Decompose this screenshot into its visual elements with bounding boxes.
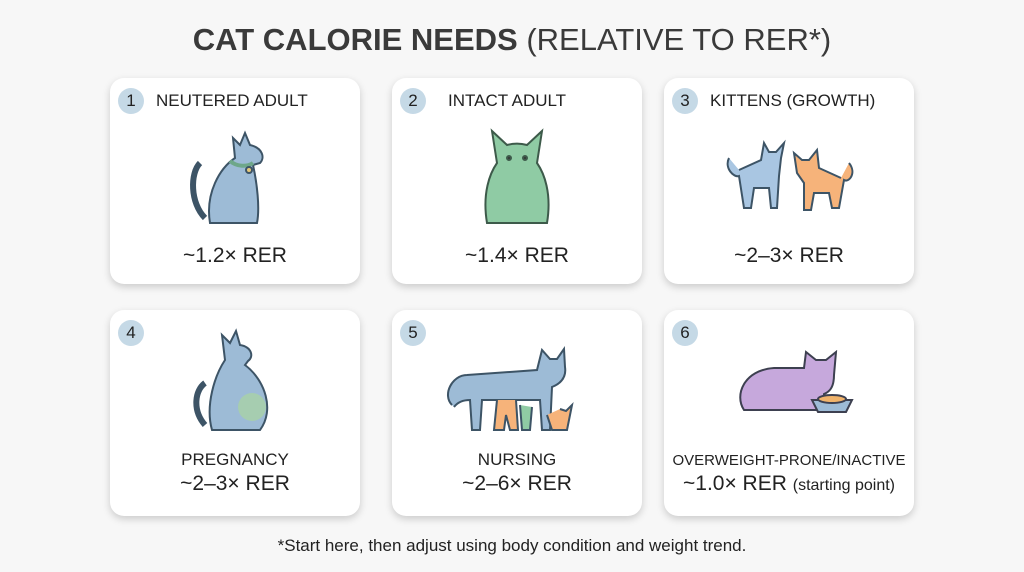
label: NEUTERED ADULT <box>156 91 308 110</box>
panel: overweight-prone <box>664 310 914 516</box>
panel: intact adult <box>392 78 642 284</box>
icon: pregnant cat <box>193 328 268 431</box>
title: CAT CALORIE NEEDS (RELATIVE TO RER*) <box>193 22 831 57</box>
panel: neutered adult <box>110 78 360 284</box>
panel: nursing: 5 <box>408 323 418 342</box>
icon: sitting cat <box>190 130 264 224</box>
value: ~2–3× RER <box>180 472 290 495</box>
panel: kittens: 3 <box>680 91 690 110</box>
value: ~1.2× RER <box>183 244 287 267</box>
badge 1 <box>118 88 144 114</box>
panel: intact adult: 2 <box>408 91 418 110</box>
icon: lying cat with bowl <box>739 350 854 413</box>
icon: two kittens <box>726 140 854 211</box>
panel: overweight-prone: ~1.0× RER (starting point) <box>683 472 895 495</box>
panel: overweight-prone: 6 <box>680 323 690 342</box>
panel: kittens: ~2–3× RER <box>734 244 844 267</box>
panel: overweight-prone: OVERWEIGHT-PRONE/INACTIVE <box>672 452 906 469</box>
panel: kittens <box>664 78 914 284</box>
panel: pregnancy <box>110 310 360 516</box>
label: PREGNANCY <box>181 450 289 469</box>
badge 1: 1 <box>126 91 136 110</box>
icon: mother cat with kittens <box>446 346 574 431</box>
footnote: *Start here, then adjust using body condition and weight trend. <box>278 536 746 555</box>
panel: intact adult: INTACT ADULT <box>448 91 566 110</box>
panel: intact adult: ~1.4× RER <box>465 244 569 267</box>
panel: nursing: NURSING <box>478 450 556 469</box>
panel: nursing <box>392 310 642 516</box>
panel: pregnancy: 4 <box>126 323 136 342</box>
icon: fluffy cat <box>484 128 550 224</box>
panel: nursing: ~2–6× RER <box>462 472 572 495</box>
panel: kittens: KITTENS (GROWTH) <box>710 91 875 110</box>
